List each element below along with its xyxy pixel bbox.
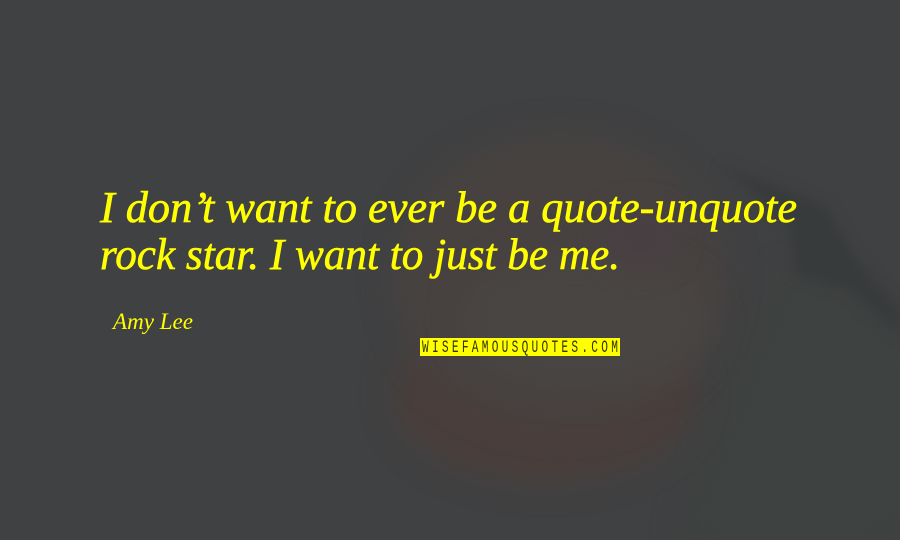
watermark badge: WISEFAMOUSQUOTES.COM bbox=[422, 339, 618, 358]
quote line 2: rock star. I want to just be me. bbox=[100, 230, 620, 279]
attribution: Amy Lee: Amy Lee bbox=[111, 309, 193, 334]
quote line 1: I don’t want to ever be a quote-unquote bbox=[99, 183, 797, 232]
quote text bbox=[99, 183, 797, 279]
